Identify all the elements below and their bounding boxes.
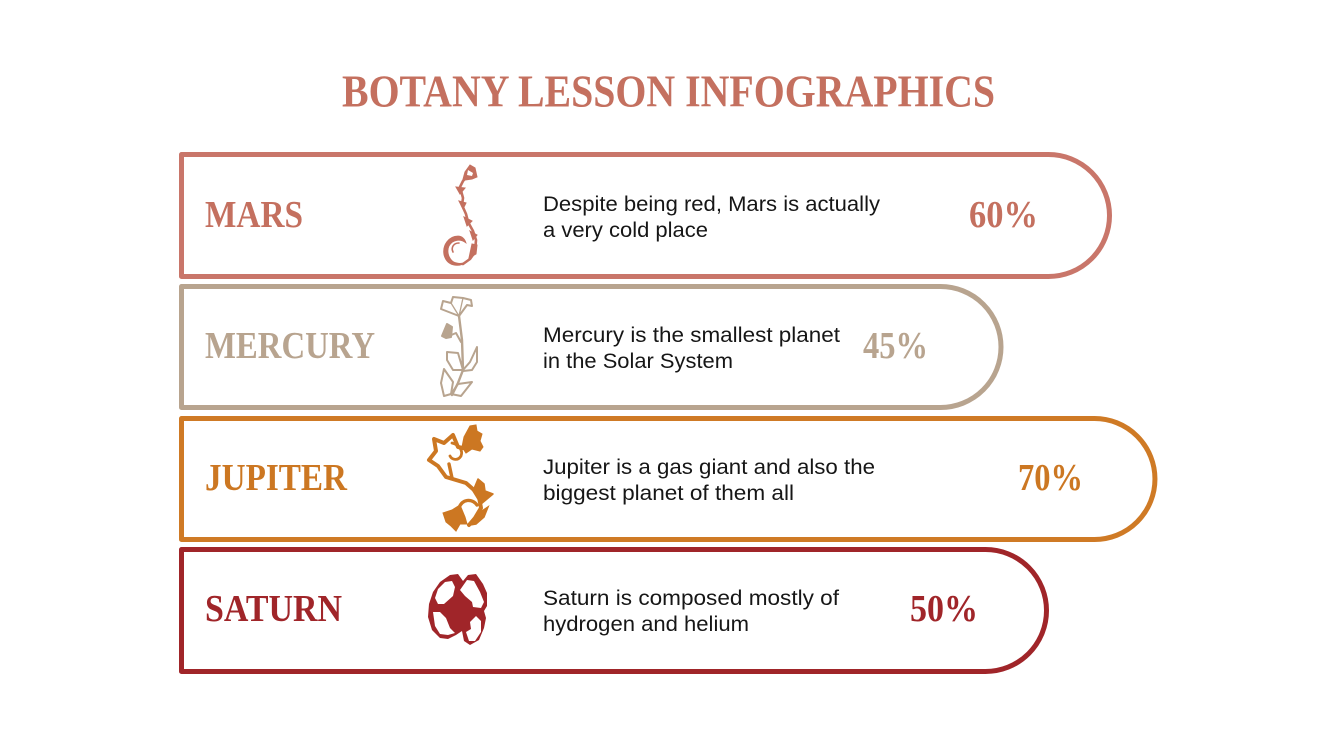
icon: Mercury flower [441, 297, 477, 396]
Saturn heading: SATURN [205, 588, 342, 630]
title: BOTANY LESSON INFOGRAPHICS [342, 66, 995, 116]
panel: Mars [182, 154, 1110, 276]
Mercury description: Mercury is the smallest planet [543, 324, 840, 347]
panel: Mercury [182, 286, 1001, 408]
Jupiter description: Jupiter is a gas giant and also the [543, 456, 875, 479]
Mercury percentage: 45% [863, 325, 928, 367]
Jupiter heading: JUPITER [205, 457, 347, 499]
panel: Saturn [182, 550, 1046, 672]
Saturn bar outline [182, 550, 1046, 672]
Mercury bar outline [182, 286, 1001, 408]
Saturn description: hydrogen and helium [543, 613, 749, 636]
icon: Jupiter vine [429, 425, 493, 531]
Mars heading: MARS [205, 194, 303, 236]
Mars bar outline [182, 154, 1110, 276]
Mercury heading: MERCURY [205, 325, 375, 367]
Mercury description: in the Solar System [543, 350, 733, 373]
Mars description: a very cold place [543, 219, 708, 242]
Saturn description: Saturn is composed mostly of [543, 587, 839, 610]
Mars description: Despite being red, Mars is actually [543, 193, 881, 216]
Saturn percentage: 50% [910, 588, 978, 630]
icon: Mars curled stem [444, 165, 477, 265]
Jupiter bar outline [182, 418, 1155, 540]
panel: Jupiter [182, 418, 1155, 540]
Mars percentage: 60% [969, 194, 1038, 236]
icon: Saturn petals [428, 574, 487, 645]
Jupiter description: biggest planet of them all [543, 482, 794, 505]
Jupiter percentage: 70% [1018, 457, 1083, 499]
